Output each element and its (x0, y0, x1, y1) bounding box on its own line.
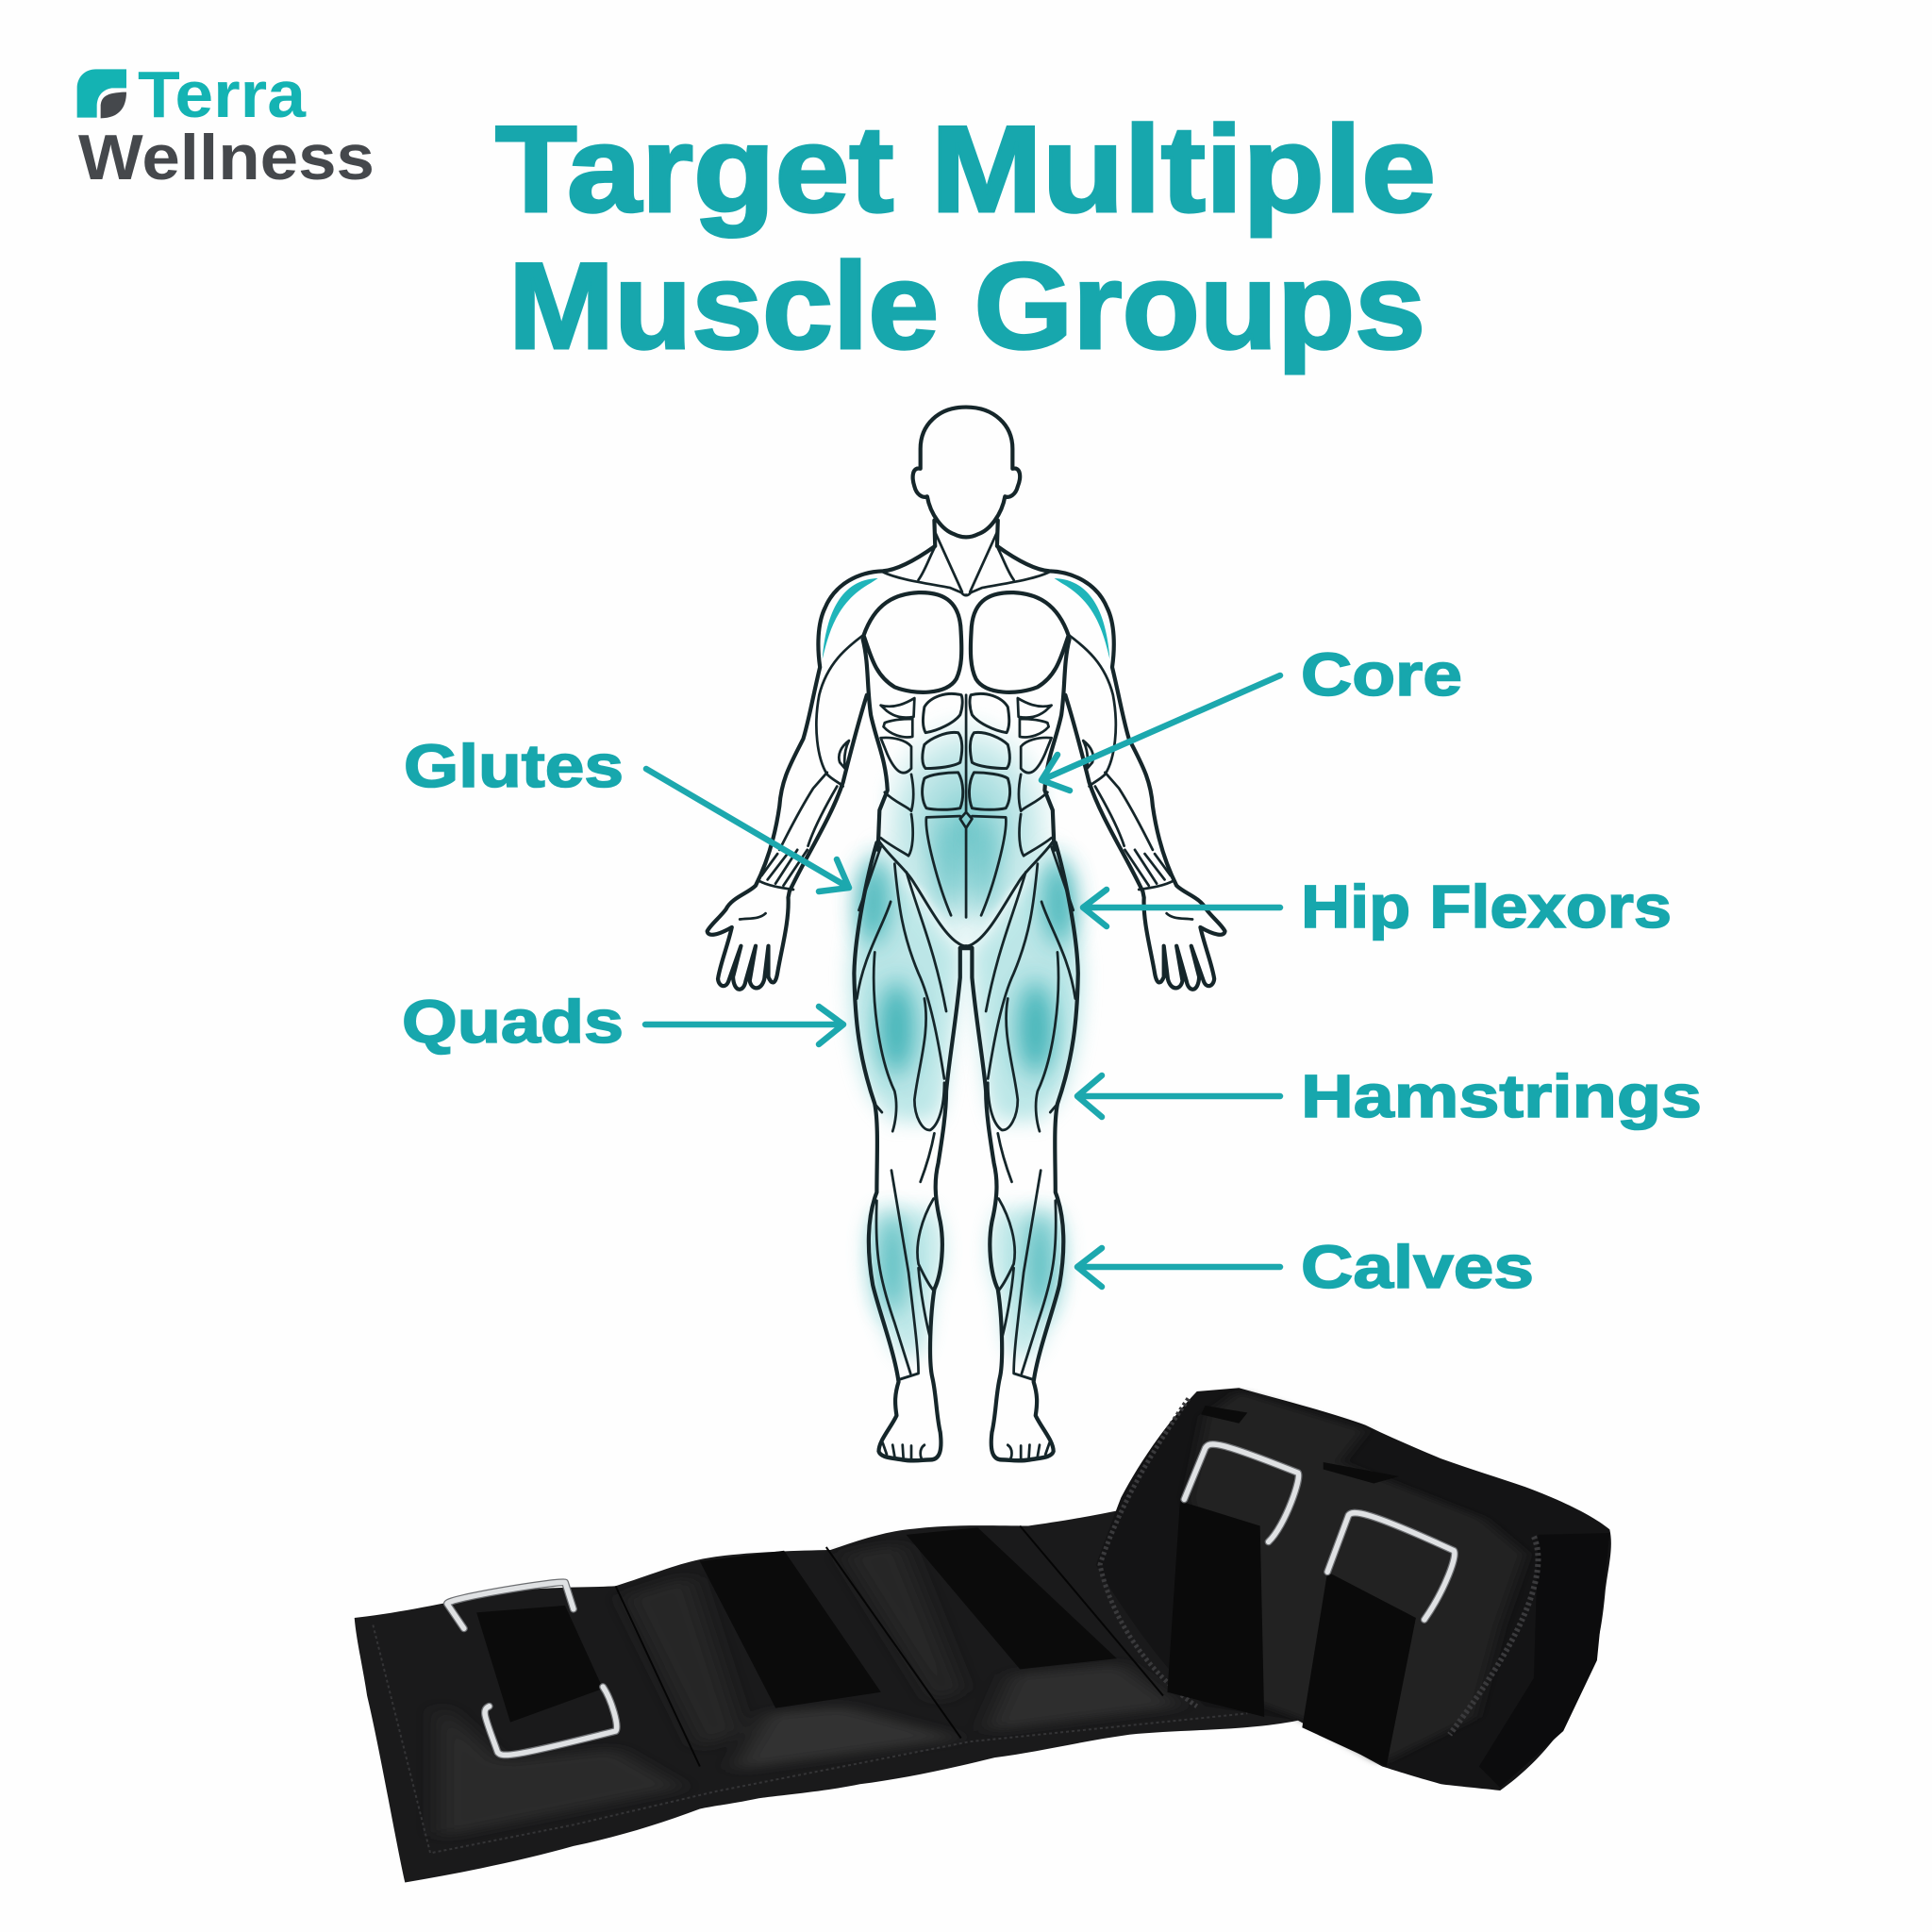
rolled ankle weight (1096, 1388, 1611, 1790)
label: Hamstrings: Hamstrings (1301, 1062, 1702, 1130)
roll band shading (1189, 1391, 1525, 1763)
label: Glutes: Glutes (404, 732, 624, 800)
head and ears (913, 408, 1020, 537)
arrow: Glutes (646, 769, 849, 891)
arrow: Core (1041, 675, 1280, 791)
hook-and-loop strips (476, 1527, 1117, 1723)
shoulder accent (823, 578, 878, 659)
upper body left half (708, 521, 966, 990)
left leg (854, 842, 960, 1460)
flat ankle weight (355, 1508, 1298, 1883)
arrow: Hamstrings (1077, 1075, 1280, 1117)
arrow: Quads (645, 1007, 843, 1044)
logo word: Wellness: Wellness (78, 122, 375, 193)
label: Hip Flexors: Hip Flexors (1301, 873, 1672, 941)
title: Muscle Groups (508, 237, 1425, 375)
hook-and-loop straps (1167, 1501, 1416, 1766)
logo: Terra Wellness (77, 58, 375, 193)
callout: Core (1041, 641, 1462, 791)
abdominal blocks (923, 693, 963, 809)
metal buckles (1184, 1444, 1299, 1541)
V line (879, 841, 966, 946)
arrow: Hip Flexors (1083, 890, 1280, 926)
ankle weights product (355, 1388, 1611, 1883)
logo word: Terra: Terra (138, 58, 307, 131)
upper body right half (966, 521, 1225, 990)
lower panel shading (439, 1543, 1180, 1838)
stitched edge (1100, 1398, 1197, 1707)
title: Target Multiple (495, 100, 1436, 238)
callout: Hip Flexors (1083, 873, 1672, 941)
body diagram: legs and feet (854, 842, 1078, 1460)
crotch cap (960, 943, 972, 953)
pectoral (864, 592, 961, 692)
right leg (972, 842, 1078, 1460)
title (495, 100, 1436, 375)
callout: Quads (402, 988, 843, 1056)
icon: leaf logo mark (77, 69, 126, 118)
callout: Hamstrings (1077, 1062, 1702, 1130)
label: Core: Core (1301, 641, 1462, 708)
metal buckles (447, 1582, 574, 1628)
callout: Calves (1077, 1233, 1534, 1301)
centre line and navel (960, 695, 972, 917)
label: Quads: Quads (402, 988, 624, 1056)
label: Calves: Calves (1301, 1233, 1534, 1301)
body diagram: upper body (708, 408, 1225, 990)
muscle glow: thighs, hips, calves and core (849, 695, 1083, 1357)
neck and collar lines (883, 532, 966, 595)
callout: Glutes (404, 732, 849, 891)
arrow: Calves (1077, 1248, 1280, 1287)
